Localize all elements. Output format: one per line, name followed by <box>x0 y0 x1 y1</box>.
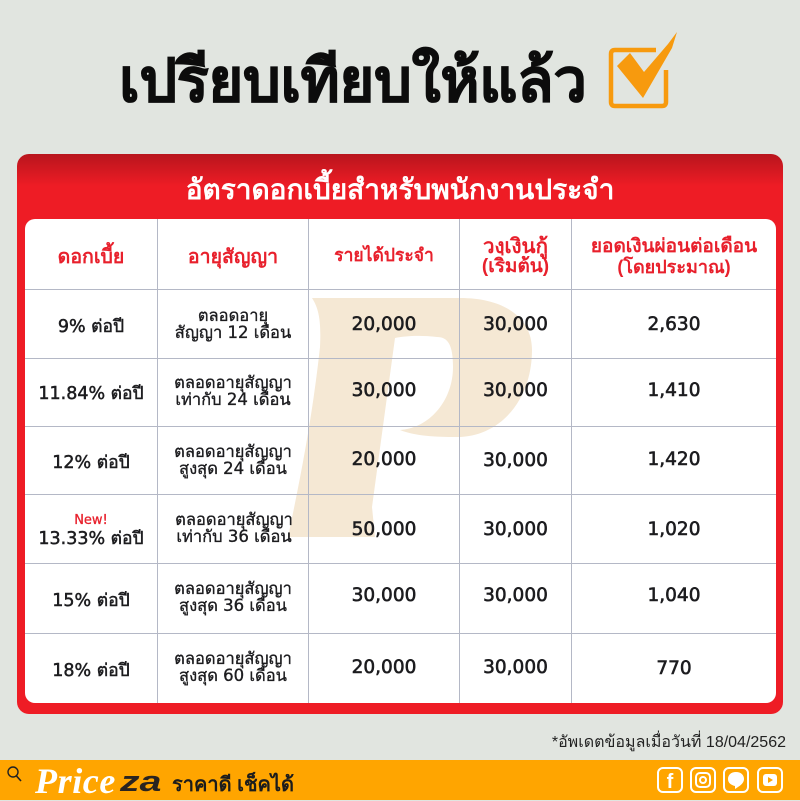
row 2: 11.84%: เท่ากับ 24 เดือน <box>175 390 291 408</box>
row 3: 12%: 12% ต่อปี <box>52 453 130 473</box>
row 5: 15%: 15% ต่อปี <box>52 591 130 611</box>
brand logo <box>35 761 161 801</box>
row 4: 13.33%: 1,020 <box>648 518 700 540</box>
row 3: 12%: สูงสุด 24 เดือน <box>179 458 287 478</box>
icon: facebook <box>657 767 683 793</box>
icon: line <box>723 767 749 793</box>
row 3: 12%: ตลอดอายุสัญญา <box>174 442 292 460</box>
row 2: 11.84%: 30,000 <box>352 380 416 401</box>
row 2: 11.84%: 1,410 <box>648 380 700 401</box>
footer bar <box>0 760 800 800</box>
row 5: 15%: 30,000 <box>483 585 548 606</box>
row 1: 9%: 30,000 <box>483 314 548 334</box>
panel heading: อัตราดอกเบี้ยสำหรับพนักงานประจำ <box>186 174 614 205</box>
row 6: 18%: 18% ต่อปี <box>52 661 130 681</box>
title: เปรียบเทียบให้แล้ว <box>119 48 587 114</box>
row 5: 15%: ตลอดอายุสัญญา <box>174 578 292 598</box>
update note: *อัพเดตข้อมูลเมื่อวันที่ 18/04/2562 <box>552 734 786 751</box>
table <box>25 219 776 703</box>
header: monthly payment: (โดยประมาณ) <box>617 257 731 277</box>
row 6: 18%: ตลอดอายุสัญญา <box>174 648 292 668</box>
icon: facebook: f <box>667 771 674 793</box>
row 4: 13.33% <box>38 510 700 549</box>
row 3: 12%: 30,000 <box>483 450 548 471</box>
row 4: 13.33%: New! <box>74 513 108 528</box>
row 1: 9%: สัญญา 12 เดือน <box>175 323 291 342</box>
row 2: 11.84%: ตลอดอายุสัญญา <box>174 372 292 392</box>
row 1: 9%: ตลอดอายุ <box>198 306 268 325</box>
header: credit limit <box>482 235 549 277</box>
icon: instagram <box>690 767 716 793</box>
icon: search <box>7 766 22 782</box>
header: credit limit: วงเงินกู้ <box>483 235 548 258</box>
watermark: P logo <box>289 298 532 537</box>
row 1: 9%: 9% ต่อปี <box>58 316 124 336</box>
header: interest: ดอกเบี้ย <box>58 246 124 268</box>
row 5: 15%: สูงสุด 36 เดือน <box>179 596 287 614</box>
row 2: 11.84% <box>38 372 700 408</box>
row 2: 11.84%: 30,000 <box>483 380 548 401</box>
icon: youtube <box>757 767 783 793</box>
row 3: 12% <box>52 442 700 478</box>
row 1: 9% <box>58 306 700 342</box>
row 4: 13.33%: เท่ากับ 36 เดือน <box>176 527 292 546</box>
panel: interest rate table <box>17 154 783 714</box>
row 6: 18%: 20,000 <box>352 657 416 678</box>
row 4: 13.33%: 13.33% ต่อปี <box>38 529 144 549</box>
row 6: 18% <box>52 648 692 686</box>
row 6: 18%: 770 <box>656 658 692 679</box>
header: monthly payment: ยอดเงินผ่อนต่อเดือน <box>591 236 757 257</box>
row 6: 18%: สูงสุด 60 เดือน <box>179 666 287 684</box>
header: income: รายได้ประจำ <box>334 245 434 265</box>
row 5: 15%: 1,040 <box>648 585 700 606</box>
row 5: 15% <box>52 578 700 616</box>
header: term: อายุสัญญา <box>188 246 278 268</box>
row 3: 12%: 20,000 <box>352 449 416 470</box>
row 1: 9%: 20,000 <box>352 314 416 334</box>
brand logo: za <box>120 766 161 798</box>
row 6: 18%: 30,000 <box>483 657 548 678</box>
row 5: 15%: 30,000 <box>352 585 416 606</box>
row 1: 9%: 2,630 <box>648 314 700 334</box>
row 3: 12%: 1,420 <box>648 449 700 470</box>
header: credit limit: (เริ่มต้น) <box>482 256 549 277</box>
header: monthly payment <box>591 236 757 277</box>
row 4: 13.33%: 50,000 <box>352 518 416 540</box>
brand logo: Price <box>35 761 116 801</box>
icon: orange check box <box>608 32 677 108</box>
row 2: 11.84%: 11.84% ต่อปี <box>38 384 144 404</box>
tagline: ราคาดี เช็คได้ <box>172 774 294 796</box>
row 4: 13.33%: 30,000 <box>483 518 548 540</box>
row 4: 13.33%: ตลอดอายุสัญญา <box>175 510 293 529</box>
